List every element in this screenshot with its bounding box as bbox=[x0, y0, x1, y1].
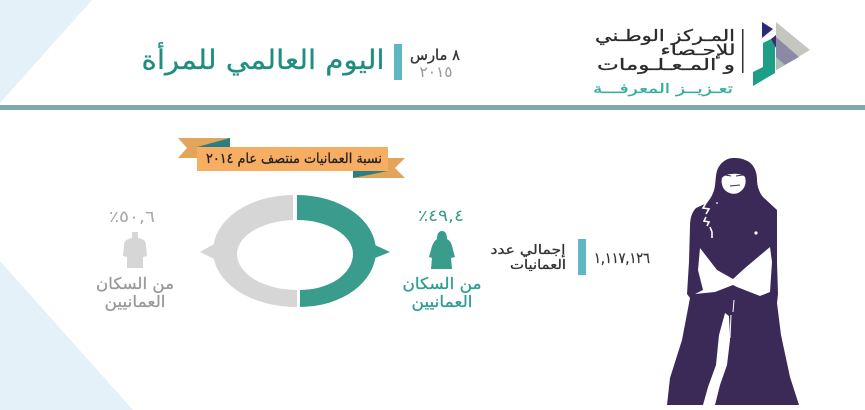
white hands and lining bbox=[695, 247, 772, 296]
logo text: و المـعـلـومات bbox=[597, 55, 735, 75]
donut segment: women 50.6% grey bbox=[213, 195, 297, 307]
label: من السكان bbox=[96, 274, 174, 294]
label: من السكان bbox=[402, 274, 482, 294]
facial features bbox=[725, 175, 743, 186]
left statistic: 50.6% bbox=[96, 207, 174, 312]
logo text: المـركز الوطـني bbox=[595, 26, 735, 46]
banner text: نسبة العمانيات منتصف عام ٢٠١٤ bbox=[206, 151, 382, 167]
title: اليوم العالمي للمرأة bbox=[142, 41, 384, 76]
ribbon banner bbox=[178, 138, 405, 178]
total divider bar bbox=[578, 239, 586, 275]
label bbox=[402, 274, 482, 312]
donut segment: women 49.4% teal bbox=[297, 195, 376, 307]
icon: grey figure bbox=[123, 232, 147, 268]
title divider bar bbox=[394, 44, 402, 80]
logo tagline: تعـزيــز المعرفـــة bbox=[593, 82, 734, 97]
logo text bbox=[595, 26, 736, 75]
illustration: woman in abaya bbox=[667, 158, 799, 405]
front seam dashes bbox=[730, 300, 734, 338]
date bbox=[410, 46, 460, 81]
label: العمانيين bbox=[412, 292, 472, 312]
logo: national centre for statistics and information bbox=[593, 22, 810, 97]
total label: العمانيات bbox=[510, 258, 566, 273]
right statistic: 49.4%: ٤٩,٤٪ bbox=[418, 206, 464, 225]
left statistic: 50.6%: ٥٠,٦٪ bbox=[109, 207, 155, 226]
donut chart bbox=[200, 195, 390, 307]
icon: teal figure bbox=[429, 231, 455, 269]
center slit bbox=[703, 313, 730, 405]
label: العمانيين bbox=[104, 292, 166, 312]
date: ٨ مارس bbox=[410, 46, 460, 64]
right statistic: 49.4% bbox=[402, 206, 482, 312]
label bbox=[96, 274, 174, 312]
face bbox=[722, 174, 746, 194]
total label: إجمالي عدد bbox=[490, 243, 566, 258]
total label bbox=[490, 243, 566, 273]
date: ٢٠١٥ bbox=[420, 63, 452, 81]
logo mark bbox=[753, 22, 810, 86]
embroidery bbox=[703, 203, 712, 238]
body bbox=[667, 158, 799, 405]
total value: ١,١١٧,١٢٦ bbox=[594, 249, 650, 267]
logo text: للإحـصاء bbox=[660, 41, 736, 59]
